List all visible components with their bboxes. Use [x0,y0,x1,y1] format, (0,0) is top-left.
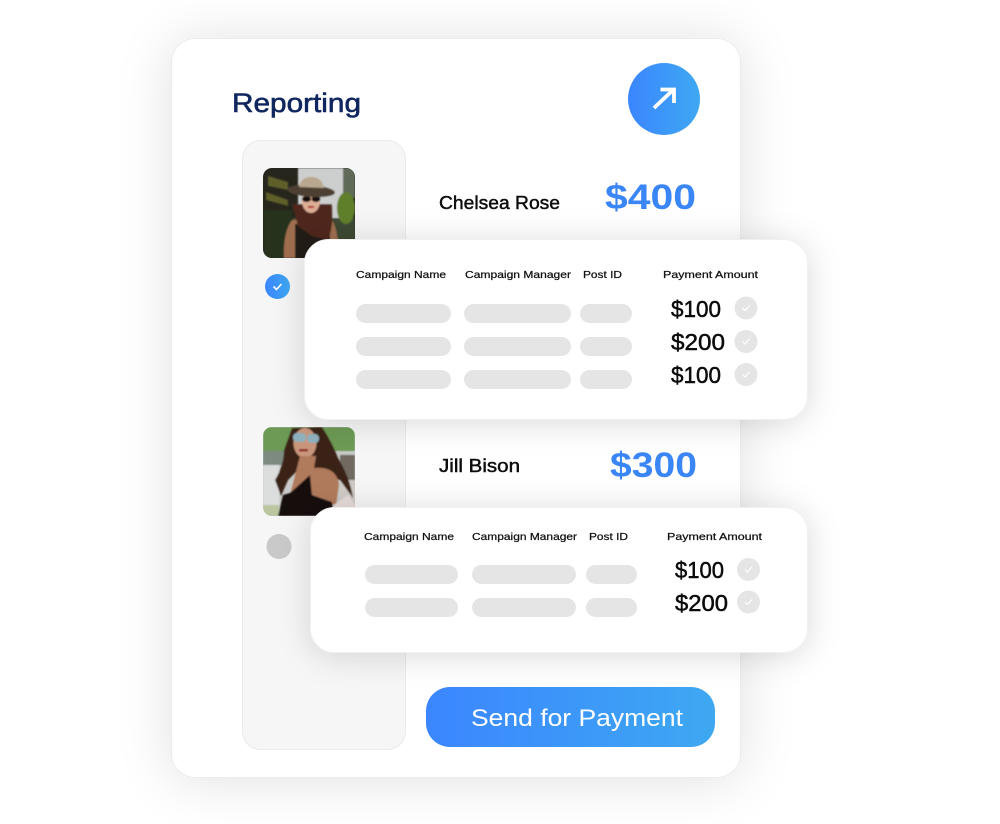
button: send for payment: Send for Payment [471,705,683,732]
payment amounts: $100 [675,557,724,583]
table header: Campaign Manager [472,531,578,543]
table header: Payment Amount [667,531,762,543]
name: Chelsea Rose: Chelsea Rose [439,193,560,213]
table header: Post ID [583,269,622,281]
table header: Campaign Name [356,269,446,281]
table header [356,269,758,281]
panel: Chelsea campaign table [304,240,808,420]
button: send for payment [426,687,715,747]
placeholder rows [365,565,637,617]
payment amounts [675,557,728,616]
table header: Campaign Name [364,531,454,543]
placeholder rows [356,304,632,389]
check icons [737,558,760,614]
icon: unselected radio [266,534,292,559]
photo: Jill Bison [263,427,355,516]
photo: Chelsea Rose [263,168,355,258]
payment amounts: $200 [671,329,725,355]
panel: reporting card [172,38,740,778]
payment amounts [671,296,725,388]
check icons [734,296,758,386]
panel: sidebar [242,140,406,750]
payment amounts: $100 [671,362,721,388]
icon: arrow button [628,63,700,135]
table header: Post ID [589,531,628,543]
amount: $300: $300 [610,446,697,485]
title: Reporting [232,88,361,118]
table header: Campaign Manager [465,269,572,281]
table header: Payment Amount [663,269,758,281]
payment amounts: $100 [671,296,721,322]
name: Jill Bison: Jill Bison [439,456,520,476]
icon: selected check [265,274,290,299]
panel: Jill campaign table [310,508,808,652]
payment amounts: $200 [675,590,728,616]
amount: $400: $400 [605,178,696,217]
table header [364,531,762,543]
